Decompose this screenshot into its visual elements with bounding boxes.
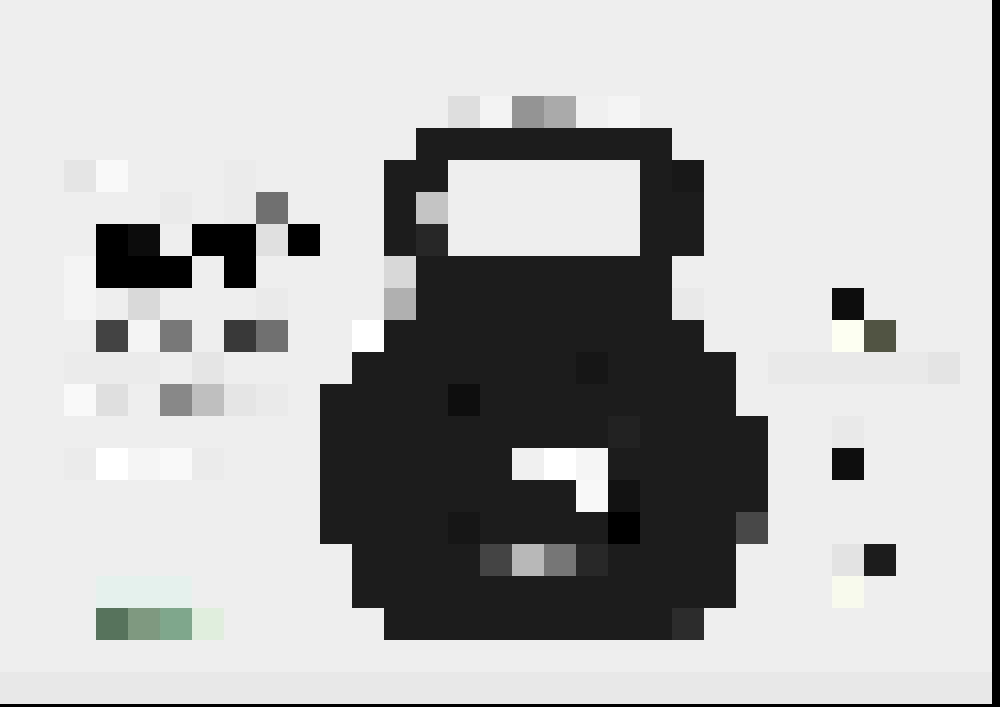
icon: green pixel logo [96, 576, 224, 640]
text block: pixelated right label [768, 288, 960, 608]
icon: kettlebell [320, 96, 768, 640]
text block: pixelated left label [64, 160, 320, 480]
